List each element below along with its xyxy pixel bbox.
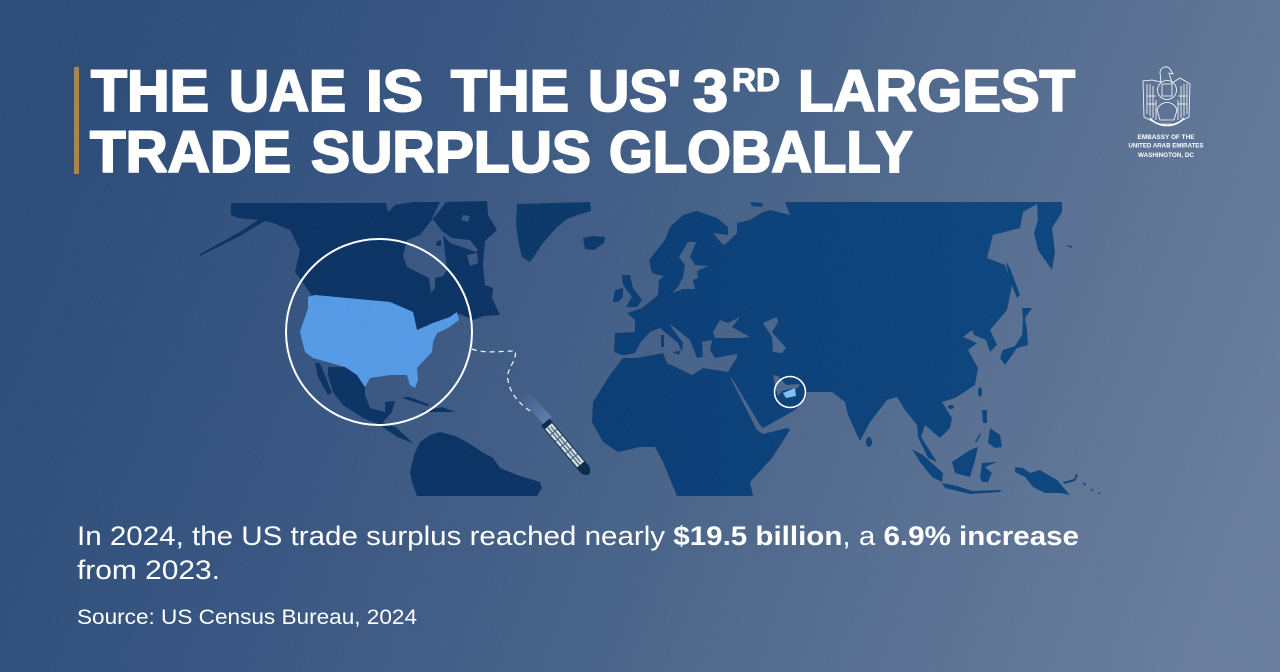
new guinea bbox=[1015, 467, 1070, 495]
sakhalin bbox=[1006, 262, 1020, 298]
sumatra bbox=[912, 449, 943, 482]
greenland bbox=[516, 202, 591, 262]
great britain bbox=[622, 275, 642, 307]
baja california bbox=[315, 363, 332, 395]
sardinia and sicily bbox=[661, 335, 680, 355]
embassy label: EMBASSY OF THE bbox=[1138, 134, 1195, 141]
body text: from 2023. bbox=[77, 555, 220, 585]
java bbox=[942, 483, 1002, 494]
title bbox=[90, 59, 1075, 185]
embassy label: UNITED ARAB EMIRATES bbox=[1128, 142, 1204, 150]
world map bbox=[200, 201, 1101, 496]
united states highlight bbox=[300, 295, 459, 388]
title: SURPLUS bbox=[311, 120, 591, 185]
title: THE bbox=[91, 59, 209, 124]
body text: In 2024, the US trade surplus reached nearly $19.5 billion , a 6.9% increase bbox=[77, 521, 1079, 551]
mexico and central america bbox=[328, 367, 413, 443]
emblem: embassy eagle bbox=[1143, 67, 1190, 126]
title: THE bbox=[451, 59, 569, 124]
title: UAE bbox=[229, 59, 346, 124]
sulawesi bbox=[980, 462, 997, 482]
embassy label bbox=[1128, 134, 1204, 159]
title: IS bbox=[366, 59, 423, 124]
title: 3 bbox=[693, 59, 728, 124]
title: LARGEST bbox=[798, 59, 1075, 124]
novaya zemlya bbox=[750, 202, 763, 207]
ireland bbox=[613, 288, 623, 302]
eurasia and africa bbox=[592, 202, 1062, 496]
sri lanka bbox=[866, 437, 872, 447]
iceland bbox=[583, 236, 605, 250]
south america bbox=[410, 432, 542, 496]
shipping route bbox=[472, 349, 533, 413]
title: US' bbox=[588, 59, 681, 124]
icon: container ship bbox=[541, 419, 593, 478]
hainan bbox=[948, 405, 954, 409]
source: Source: US Census Bureau, 2024 bbox=[77, 606, 417, 629]
pacific islets bbox=[1063, 245, 1101, 494]
japan bbox=[1000, 308, 1032, 365]
gold accent bar bbox=[74, 67, 79, 174]
circle marker: uae bbox=[774, 376, 806, 408]
title: RD bbox=[732, 62, 780, 98]
taiwan bbox=[978, 387, 982, 397]
body text bbox=[77, 521, 1079, 585]
caribbean islands bbox=[402, 397, 455, 412]
title: TRADE bbox=[90, 120, 291, 185]
korea bbox=[972, 330, 997, 352]
borneo bbox=[952, 447, 978, 477]
uae highlight bbox=[783, 388, 796, 398]
magnifier circle: united states bbox=[286, 239, 472, 425]
ship wake bbox=[520, 392, 552, 424]
title: GLOBALLY bbox=[609, 120, 913, 185]
north america bbox=[200, 201, 500, 331]
embassy label: WASHINGTON, DC bbox=[1138, 152, 1194, 159]
philippines bbox=[975, 410, 1002, 448]
